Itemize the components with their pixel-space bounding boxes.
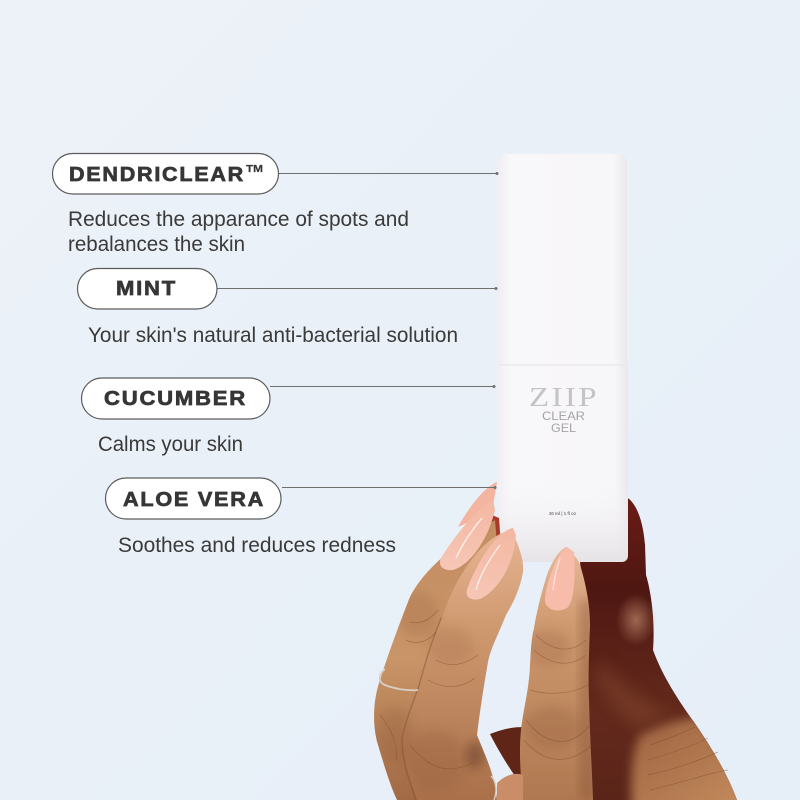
connector line (270, 386, 494, 388)
product name: CLEAR (542, 409, 585, 423)
hand: back of hand and thumb (490, 497, 760, 800)
ring finger nail (440, 500, 495, 570)
brand name: ZIIP (529, 382, 599, 412)
pill label (106, 478, 281, 519)
pill label (52, 154, 278, 194)
front finger (520, 547, 593, 800)
ingredient: Aloe Vera (106, 478, 496, 557)
ingredient: Dendriclear: DENDRICLEAR (69, 164, 245, 186)
front finger nail (545, 547, 575, 610)
ingredient: Aloe Vera: ALOE VERA (123, 489, 265, 511)
ingredient: Mint (78, 268, 498, 347)
bottle body (497, 365, 628, 562)
description: Soothes and reduces redness (118, 534, 396, 557)
pill label (78, 268, 217, 309)
product bottle (497, 154, 628, 562)
pill label (82, 378, 270, 419)
middle finger nail (467, 528, 516, 600)
bottle cap (498, 154, 627, 384)
ingredient: Cucumber (82, 378, 496, 456)
connector line (282, 486, 495, 488)
connector line (217, 288, 496, 290)
ingredient: Dendriclear: TM (246, 164, 263, 175)
infographic canvas (52, 152, 737, 800)
ingredient: Dendriclear: rebalances the skin (68, 233, 245, 256)
description: Your skin's natural anti-bacterial solution (88, 324, 458, 347)
hand: fingers (374, 482, 594, 800)
pinky nail (458, 482, 497, 527)
ingredient: Mint: MINT (116, 278, 177, 300)
description: Calms your skin (98, 433, 243, 456)
volume: 30 ml | 1 fl oz (549, 511, 577, 516)
product bottle: GEL (551, 421, 576, 435)
seam shadow between fingers (403, 618, 442, 800)
small finger at base (497, 774, 523, 800)
skin creases (380, 610, 592, 769)
connector line (279, 172, 497, 174)
description: Reduces the apparance of spots and (68, 208, 409, 231)
knuckle shading (377, 593, 594, 800)
centre finger (403, 530, 523, 800)
ingredient: Dendriclear (52, 154, 498, 256)
lower ring (491, 776, 496, 800)
ingredient: Cucumber: CUCUMBER (104, 388, 247, 410)
ring (380, 669, 418, 690)
red skin behind bottle corner (488, 515, 501, 560)
outer finger (374, 520, 497, 800)
